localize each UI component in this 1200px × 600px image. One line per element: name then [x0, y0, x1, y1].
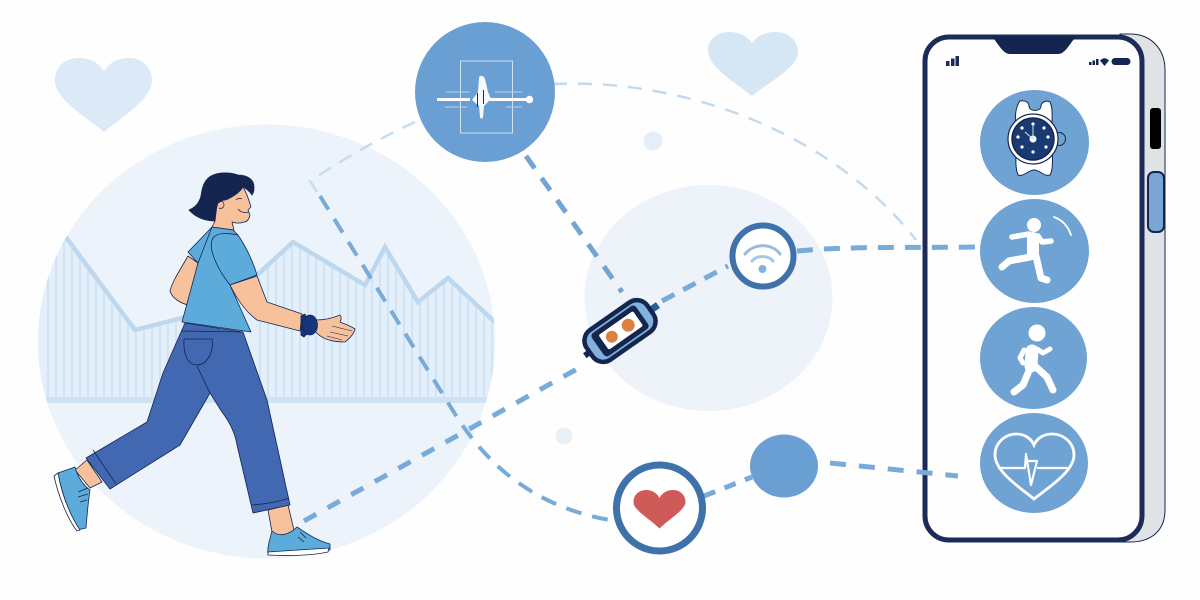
arrow: dashed line from corner to heart: [320, 196, 610, 520]
front lower leg: [268, 505, 294, 537]
panel: smartphone: [925, 34, 1165, 542]
icon: heart ring: [616, 465, 702, 551]
arrow: light dashed arc from ECG to phone: [553, 84, 916, 240]
arrow: dashed line from heart to blue dot: [704, 477, 752, 496]
shirt: [182, 227, 257, 332]
arrow: light dashed line from ECG to corner: [310, 122, 415, 192]
wrist tracker: [301, 314, 318, 337]
hand: [315, 315, 355, 342]
pants: [86, 323, 290, 513]
panel: activity background circle with chart: [30, 124, 500, 558]
icon: plain blue dot: [750, 434, 818, 498]
signal icon left: [946, 56, 959, 66]
panel: central pale circle: [584, 185, 832, 411]
icon: heart pulse tile: [980, 413, 1088, 513]
figure: walking woman: [54, 173, 355, 556]
icon: left pale heart: [55, 58, 152, 132]
phone side shell: [1120, 34, 1165, 542]
arrow: dashed line from wifi to phone: [797, 247, 975, 251]
icon: walking person tile: [980, 307, 1087, 409]
lower side button: [1148, 172, 1164, 232]
icon: running person tile: [980, 199, 1089, 303]
decorative dot lower: [556, 428, 572, 444]
icon: ECG circle: [415, 22, 555, 162]
shirt sleeve line: [198, 227, 238, 285]
back shoe: [58, 467, 90, 530]
phone notch: [991, 36, 1077, 54]
hair: [189, 173, 254, 221]
back lower leg: [75, 460, 102, 488]
arrow: dashed line from shoe to device: [304, 364, 586, 521]
back arm: [170, 256, 198, 305]
icon: wifi ring: [732, 226, 794, 286]
icon: wearable device: [574, 290, 668, 370]
front arm: [230, 276, 302, 331]
decorative dot upper: [644, 132, 662, 150]
smile and ear: [217, 198, 249, 213]
icon: right pale heart: [708, 32, 798, 96]
arrow: dashed line from blue dot to phone: [830, 463, 958, 476]
arrow: dashed line from device to wifi: [662, 266, 728, 301]
upper side button: [1150, 108, 1161, 149]
face and neck: [212, 187, 251, 230]
status icons right: [1089, 58, 1130, 66]
phone screen: [925, 37, 1142, 540]
pants details: [93, 331, 289, 505]
icon: watch tile: [980, 90, 1089, 195]
arrow: dashed line from ECG to device: [526, 156, 622, 292]
front shoe: [268, 527, 330, 555]
